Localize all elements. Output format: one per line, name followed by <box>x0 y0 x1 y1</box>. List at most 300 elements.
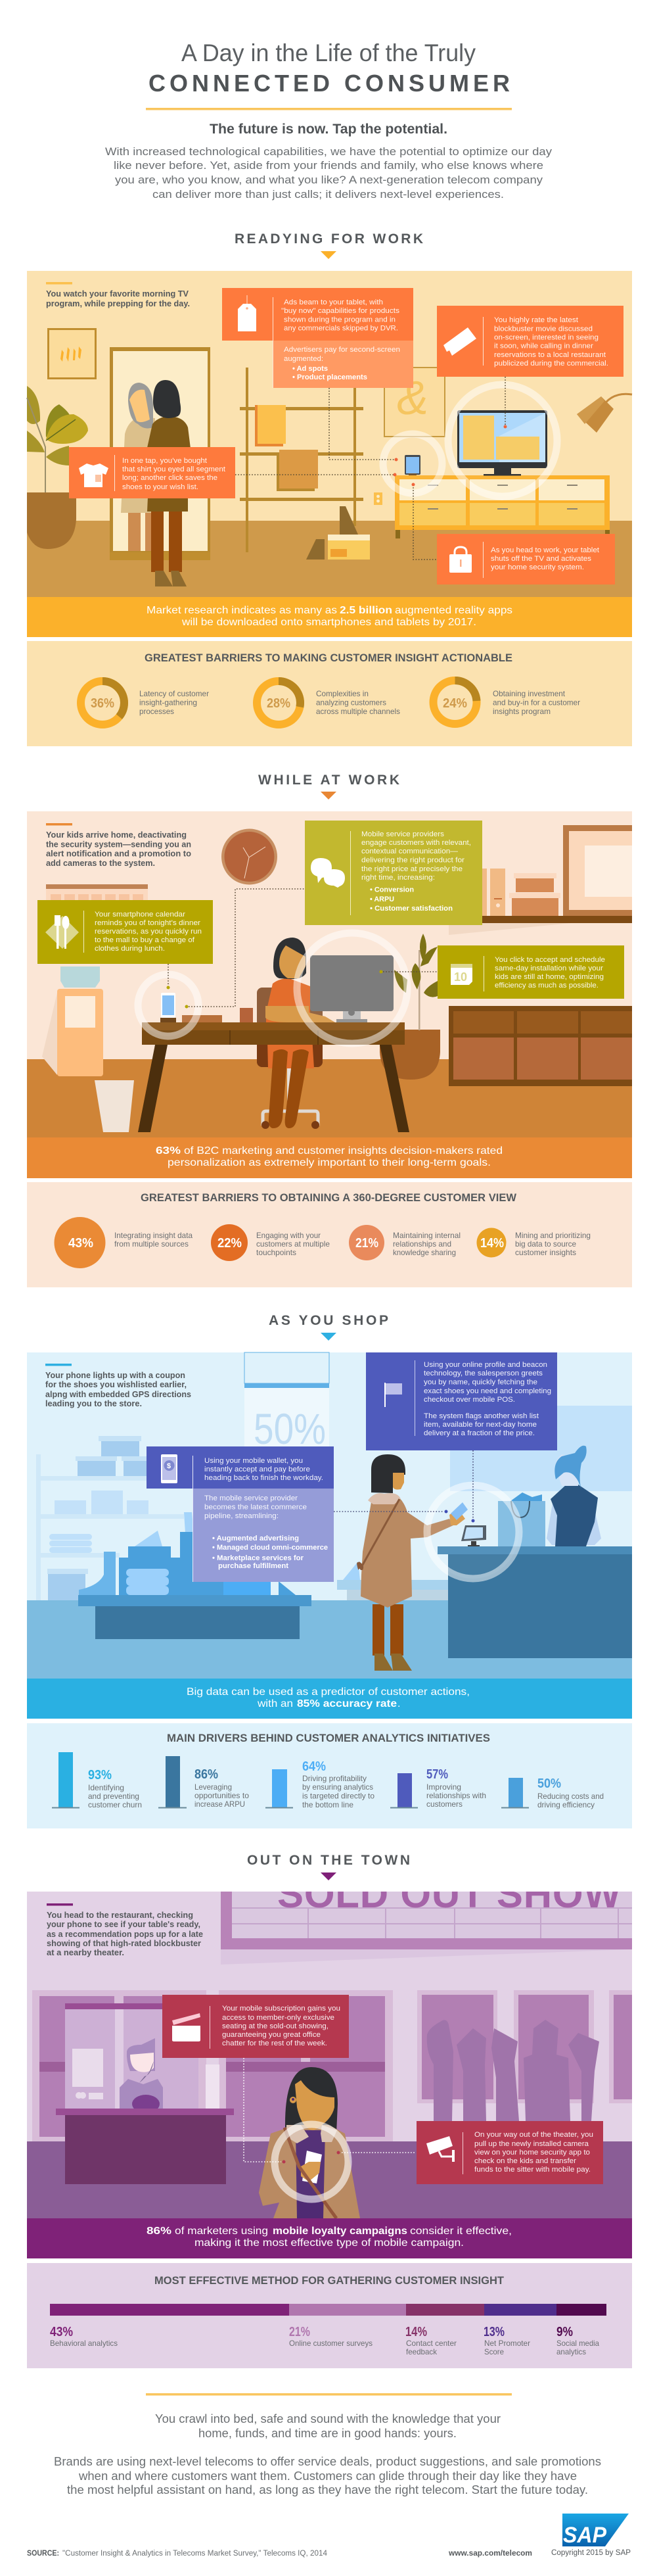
icon: shirt <box>79 464 108 487</box>
shelf with boxes <box>449 825 632 935</box>
SAP logo: SAP <box>563 2523 606 2548</box>
callout: service providers: • ARPU <box>370 895 394 903</box>
theater marquee: SOLD OUT SHOW <box>277 1872 621 1916</box>
donut 24% <box>434 680 477 724</box>
label 50%: Reducing costs and <box>537 1792 604 1801</box>
callout: movie rating: You highly rate the latest <box>494 316 578 324</box>
callout: salesperson greeting: exact shoes you need and completing <box>424 1387 551 1395</box>
callout: service providers: • Conversion <box>370 886 414 894</box>
label 64% <box>302 1759 374 1809</box>
outlet <box>374 492 382 505</box>
lamp <box>577 394 632 433</box>
bar 93% <box>52 1752 79 1808</box>
label 24%: and buy-in for a customer <box>493 698 580 707</box>
stat band: mobile loyalty campaigns: making it the most effective type of mobile campaign. <box>194 2237 464 2249</box>
label 9% <box>556 2325 599 2356</box>
bubble 43% <box>54 1217 105 1268</box>
callout: movie rating <box>437 306 623 377</box>
intro paragraph: like never before. Yet, aside from your friends and family, who else knows where <box>114 159 543 172</box>
heading: MAIN DRIVERS BEHIND CUSTOMER ANALYTICS INITIATIVES <box>167 1732 490 1744</box>
icon: calendar <box>451 964 472 985</box>
chair <box>257 988 323 1129</box>
callout: mobile wallet <box>147 1446 334 1582</box>
callout: member seating: chatter for the rest of the week. <box>222 2039 327 2047</box>
label 28% <box>316 689 400 716</box>
callout: mobile wallet: • Managed cloud omni-commerce <box>212 1544 328 1552</box>
label 22% <box>256 1231 330 1257</box>
intro text <box>46 282 190 308</box>
callout: home security: your home security system. <box>491 563 584 571</box>
display table with goods <box>78 1532 311 1639</box>
donut 24%: 24% <box>443 696 467 711</box>
callout: security camera: check on the kids and transfer <box>474 2157 576 2165</box>
label 43% <box>50 2325 118 2348</box>
label 14% <box>515 1231 591 1257</box>
intro text: for the shoes you wishlisted earlier, <box>45 1379 187 1389</box>
callout: shirt purchase: long; another click saves the <box>122 474 217 482</box>
bubble 14% <box>477 1228 506 1257</box>
plant <box>27 386 88 549</box>
stat band: big data accuracy: . <box>397 1698 400 1709</box>
closing text: the most helpful assistant on hand, as long as they have the right telecom. Start the future today. <box>67 2483 588 2496</box>
callout: calendar reminder <box>37 900 213 964</box>
callout: security camera <box>417 2121 603 2184</box>
callout: salesperson greeting: technology, the salesperson greets <box>424 1370 543 1377</box>
label 43%: 43% <box>50 2325 73 2339</box>
label 36%: Latency of customer <box>139 689 209 698</box>
pedestal behind shopper <box>337 1562 452 1600</box>
heading: while at work <box>258 773 399 799</box>
source: SOURCE: <box>27 2550 59 2558</box>
dotted connector lines <box>244 2058 415 2163</box>
label 36%: processes <box>139 707 174 716</box>
label 43%: from multiple sources <box>114 1239 189 1249</box>
heading: GREATEST BARRIERS TO MAKING CUSTOMER INSIGHT ACTIONABLE <box>145 652 512 664</box>
label 22%: Engaging with your <box>256 1231 321 1240</box>
label 57%: Improving <box>426 1782 461 1792</box>
callout: service providers: right time, increasing: <box>361 874 435 882</box>
panel: most effective method stacked bar <box>27 2263 632 2368</box>
label 57%: customers <box>426 1800 463 1809</box>
callout: member seating <box>162 1995 349 2058</box>
subtitle: The future is now. Tap the potential. <box>210 122 447 137</box>
label 14%: big data to source <box>515 1239 576 1249</box>
callout: ads on tablet: Advertisers pay for second-screen <box>284 346 400 354</box>
cashier <box>120 2038 163 2113</box>
panel: readying for work scene <box>27 271 632 597</box>
closing text: You crawl into bed, safe and sound with the knowledge that your <box>155 2412 501 2425</box>
label 64%: the bottom line <box>302 1800 353 1809</box>
sale window <box>244 1352 329 1453</box>
label 21%: Maintaining internal <box>393 1231 461 1240</box>
heading: GREATEST BARRIERS TO OBTAINING A 360-DEGREE CUSTOMER VIEW <box>141 1191 517 1204</box>
label 14%: customer insights <box>515 1248 576 1257</box>
label 64%: is targeted directly to <box>302 1792 374 1801</box>
bubble 14%: 14% <box>480 1236 504 1251</box>
callout: service providers <box>305 821 482 925</box>
heading: out on the town <box>247 1853 410 1880</box>
intro paragraph: can deliver more than just calls; it delivers next-level experiences. <box>152 188 504 201</box>
label 64%: by ensuring analytics <box>302 1782 373 1792</box>
callout: service providers: • Customer satisfaction <box>370 905 453 913</box>
callout: mobile wallet: becomes the latest commerce <box>204 1504 307 1512</box>
callout: movie rating: it soon, while calling in dinner <box>494 343 593 350</box>
desk <box>138 1022 409 1132</box>
callout: ads on tablet: "buy now" capabilities for products <box>281 307 400 315</box>
footer <box>27 2514 631 2558</box>
label 64%: Driving profitability <box>302 1774 367 1783</box>
stat band: mobile loyalty campaigns: consider it effective, <box>410 2226 512 2237</box>
callout: mobile wallet: heading back to finish the workday. <box>204 1474 323 1482</box>
label 21% <box>289 2325 373 2348</box>
donut 28%: 28% <box>267 696 290 711</box>
stat band: personalization: of B2C marketing and customer insights decision-makers rated <box>184 1145 503 1157</box>
dresser <box>395 475 610 538</box>
label 14% <box>405 2325 457 2356</box>
heading: as you shop <box>269 1313 388 1341</box>
label 21%: knowledge sharing <box>393 1248 456 1257</box>
shopping bag <box>498 1492 545 1546</box>
label 24% <box>493 689 580 716</box>
website: www.sap.com/telecom <box>448 2550 532 2558</box>
label 14%: Mining and prioritizing <box>515 1231 591 1240</box>
box and boots <box>306 506 370 560</box>
desk items <box>160 993 253 1022</box>
stat band: augmented reality apps: Market research indicates as many as <box>147 605 337 616</box>
intro text: at a nearby theater. <box>47 1947 124 1957</box>
label 86%: opportunities to <box>194 1791 249 1800</box>
label 28%: Complexities in <box>316 689 369 698</box>
callout: mobile wallet: Using your mobile wallet, you <box>204 1457 303 1465</box>
icon: lock <box>449 547 472 573</box>
callout: salesperson greeting <box>366 1352 557 1450</box>
donut 36%: 36% <box>91 696 114 711</box>
title: CONNECTED CONSUMER <box>148 70 510 97</box>
stat band: big data accuracy: with an <box>257 1698 293 1709</box>
callout: ads on tablet <box>222 288 413 388</box>
label 93% <box>88 1768 142 1809</box>
label 22%: touchpoints <box>256 1248 296 1257</box>
intro paragraph: you are, who you know, and what you like? A next-generation telecom company <box>115 174 543 186</box>
mirror <box>110 347 210 560</box>
stat band: mobile loyalty campaigns: mobile loyalty campaigns <box>273 2226 407 2237</box>
stat band: personalization <box>27 1137 632 1178</box>
intro text: You head to the restaurant, checking <box>47 1910 193 1920</box>
theater windows <box>32 1990 632 2141</box>
intro text: alpng with embedded GPS directions <box>45 1389 191 1399</box>
label 9%: 9% <box>556 2325 573 2339</box>
label 57%: relationships with <box>426 1791 486 1800</box>
wall clock <box>221 828 277 885</box>
bubble 22% <box>211 1224 248 1261</box>
panel: barriers to 360-degree view <box>27 1182 632 1287</box>
callout: member seating: Your mobile subscription gains you <box>222 2005 340 2013</box>
label 21% <box>393 1231 461 1257</box>
wall picture <box>49 329 96 379</box>
stat band: personalization: 63% <box>156 1145 181 1157</box>
callout: shirt purchase: that shirt you eyed all segment <box>122 465 225 473</box>
bar 57% <box>390 1773 418 1808</box>
callout: calendar reminder: to the mall to buy a change of <box>95 936 195 944</box>
callout: movie rating: publicized during the commercial. <box>494 360 608 368</box>
stat band: augmented reality apps: 2.5 billion <box>340 605 392 616</box>
label 13%: Net Promoter <box>484 2339 530 2348</box>
intro text: program, while prepping for the day. <box>46 298 190 308</box>
label 86%: 86% <box>194 1767 218 1782</box>
label 43%: Behavioral analytics <box>50 2339 118 2348</box>
stacked bar <box>50 2304 606 2316</box>
label 9%: analytics <box>556 2347 586 2356</box>
stat band: augmented reality apps <box>27 597 632 637</box>
stat band: augmented reality apps: augmented reality apps <box>395 605 512 616</box>
bubble 21%: 21% <box>355 1236 378 1251</box>
highlight ring <box>275 2124 348 2199</box>
callout: mobile wallet: purchase fulfillment <box>218 1562 288 1570</box>
waste bin <box>95 1080 134 1132</box>
callout: same-day installation: kids are still at home, optimizing <box>495 973 604 981</box>
callout: mobile wallet: • Augmented advertising <box>212 1535 299 1542</box>
label 14%: Contact center <box>406 2339 457 2348</box>
intro text: Your kids arrive home, deactivating <box>46 830 187 840</box>
queue silhouettes <box>427 2020 599 2121</box>
label 28%: analyzing customers <box>316 698 386 707</box>
stat band: mobile loyalty campaigns: 86% <box>147 2226 171 2237</box>
icon: flag <box>384 1383 402 1407</box>
label 64%: 64% <box>302 1759 326 1774</box>
stat band: big data accuracy: Big data can be used as a predictor of customer actions, <box>187 1686 470 1698</box>
heading: readying for work: READYING FOR WORK <box>235 231 423 247</box>
callout: calendar reminder: Your smartphone calendar <box>95 911 185 918</box>
intro text: your phone to see if your table's ready, <box>47 1919 200 1929</box>
heading: as you shop: AS YOU SHOP <box>269 1313 388 1328</box>
callout: shirt purchase: In one tap, you've bought <box>122 457 207 465</box>
label 9%: Social media <box>556 2339 599 2348</box>
callout: calendar reminder: clothes during lunch. <box>95 945 165 953</box>
wall art: & <box>397 372 428 425</box>
callout: home security <box>437 534 615 584</box>
reflection in mirror <box>121 383 155 551</box>
label 50%: 50% <box>537 1777 561 1791</box>
callout: shirt purchase <box>69 447 235 498</box>
closing text: when and where customers want them. Customers can glide through their day like they have <box>78 2469 577 2483</box>
intro text <box>46 823 191 868</box>
callout: service providers: the right price at precisely the <box>361 865 463 873</box>
icon: ticket <box>443 327 476 356</box>
woman at desk <box>265 938 335 1128</box>
highlight rings <box>138 933 407 1043</box>
callout: movie rating: reservations to a local restaurant <box>494 351 606 359</box>
intro text <box>47 1903 203 1957</box>
callout: member seating: guaranteeing you great office <box>222 2031 321 2039</box>
panel: while at work scene <box>27 811 632 1137</box>
closing text: Brands are using next-level telecoms to offer service deals, product suggestions, and sale promotions <box>54 2455 601 2468</box>
label 57%: 57% <box>426 1767 448 1782</box>
callout: calendar reminder: reminds you of tonight's dinner <box>95 919 200 927</box>
label 14%: feedback <box>406 2347 438 2356</box>
copyright: Copyright 2015 by SAP <box>551 2549 631 2557</box>
heading: while at work: WHILE AT WORK <box>258 773 399 788</box>
label 57% <box>426 1767 486 1809</box>
intro text: alert notification and a promotion to <box>46 849 191 859</box>
label 28%: across multiple channels <box>316 707 400 716</box>
intro text: leading you to the store. <box>45 1398 142 1408</box>
stat band: augmented reality apps: will be downloaded onto smartphones and tablets by 2017. <box>181 617 476 628</box>
water cooler <box>42 966 103 1076</box>
bubble 21% <box>349 1225 384 1260</box>
stat band: mobile loyalty campaigns <box>27 2218 632 2258</box>
callout: service providers: contextual communication— <box>361 847 458 855</box>
label 24%: insights program <box>493 707 551 716</box>
icon: phone with dollar: $ <box>167 1462 171 1470</box>
ticket booth <box>56 2003 234 2184</box>
callout: security camera: view on your home security app to <box>474 2149 590 2157</box>
panel: as you shop scene <box>27 1352 632 1679</box>
icon: phone with dollar <box>161 1454 177 1483</box>
callout: service providers: engage customers with relevant, <box>361 839 471 847</box>
bar 64% <box>265 1769 293 1808</box>
highlight rings <box>383 385 557 496</box>
bubble 43%: 43% <box>68 1236 93 1251</box>
label 86% <box>194 1767 249 1809</box>
dotted connector lines <box>167 889 438 1009</box>
wall calendar <box>46 884 148 900</box>
callout: ads on tablet: augmented: <box>284 355 323 363</box>
title <box>148 39 510 97</box>
label 93%: customer churn <box>88 1800 142 1809</box>
callout: ads on tablet: shown during the program and in <box>284 316 396 323</box>
label 93%: and preventing <box>88 1792 139 1801</box>
shopper <box>358 1454 468 1671</box>
callout: mobile wallet: • Marketplace services for <box>212 1554 304 1562</box>
callout: mobile wallet: instantly accept and pay before <box>204 1466 310 1473</box>
label 36% <box>139 689 209 716</box>
callout: ads on tablet: any commercials skipped by DVR. <box>284 325 398 333</box>
callout: ads on tablet: • Product placements <box>292 373 367 381</box>
counter <box>438 1546 632 1658</box>
intro text: add cameras to the system. <box>46 858 155 868</box>
closing text: home, funds, and time are in good hands: yours. <box>198 2427 457 2440</box>
intro text <box>45 1364 191 1408</box>
callout: mobile wallet: pipeline, streamlining: <box>204 1512 279 1520</box>
callout: home security: As you head to work, your tablet <box>491 546 599 554</box>
callout: home security: shuts off the TV and activates <box>491 555 592 563</box>
title: A Day in the Life of the Truly <box>181 39 476 66</box>
plant <box>380 934 440 1080</box>
highlight ring <box>427 1485 519 1579</box>
icon: camera <box>426 2136 455 2162</box>
icon: clapperboard <box>172 2013 200 2041</box>
callout: member seating: seating at the sold-out showing, <box>222 2022 328 2030</box>
callout: service providers: Mobile service providers <box>361 830 445 838</box>
label 13%: 13% <box>484 2325 505 2339</box>
stat band: big data accuracy <box>27 1679 632 1719</box>
intro text: You watch your favorite morning TV <box>46 289 189 298</box>
intro paragraph: With increased technological capabilities, we have the potential to optimize our day <box>105 145 553 158</box>
callout: salesperson greeting: The system flags another wish list <box>424 1412 539 1420</box>
label 13% <box>484 2325 530 2356</box>
heading: readying for work <box>235 231 423 259</box>
label 86%: Leveraging <box>194 1782 232 1792</box>
callout: same-day installation: efficiency as much as possible. <box>495 982 599 990</box>
intro paragraph <box>105 145 553 201</box>
sale window: 50% <box>254 1404 326 1453</box>
heading: out on the town: OUT ON THE TOWN <box>247 1853 410 1868</box>
wall art <box>384 368 445 437</box>
SAP logo <box>562 2514 629 2548</box>
tablet <box>405 455 420 475</box>
stat band: mobile loyalty campaigns: of marketers using <box>175 2226 268 2237</box>
theater marquee <box>221 1892 632 1965</box>
label 86%: increase ARPU <box>194 1800 245 1809</box>
callout: security camera: pull up the newly installed camera <box>474 2140 589 2148</box>
bar 50% <box>501 1778 529 1808</box>
label 50%: driving efficiency <box>537 1800 595 1809</box>
callout: security camera: On your way out of the theater, you <box>474 2131 593 2139</box>
intro text: showing of that high-rated blockbuster <box>47 1938 201 1948</box>
monitor <box>310 955 394 1022</box>
callout: movie rating: on-screen, interested in seeing <box>494 333 599 341</box>
label 93%: 93% <box>88 1768 112 1782</box>
shelves <box>36 1436 194 1600</box>
label 24%: Obtaining investment <box>493 689 566 698</box>
salesperson <box>547 1446 601 1546</box>
label 21%: 21% <box>289 2325 310 2339</box>
intro text: as a recommendation pops up for a late <box>47 1929 203 1939</box>
panel: main drivers bar chart <box>27 1723 632 1828</box>
callout: salesperson greeting: delivery at a fraction of the price. <box>424 1429 535 1437</box>
label 43%: Integrating insight data <box>114 1231 193 1240</box>
icon: fork and spoon <box>45 915 79 949</box>
intro text: Your phone lights up with a coupon <box>45 1370 185 1380</box>
callout: salesperson greeting: item, available for next-day home <box>424 1421 537 1429</box>
icon: price tag <box>238 295 256 331</box>
callout: salesperson greeting: Using your online profile and beacon <box>424 1361 547 1369</box>
panel: barriers to actionable insight <box>27 641 632 746</box>
stat band: personalization: personalization as extremely important to their long-term goals. <box>168 1157 491 1168</box>
label 50% <box>537 1777 604 1809</box>
dotted connector lines <box>235 377 507 560</box>
woman with phone <box>259 2067 360 2218</box>
bar 86% <box>158 1756 187 1808</box>
callout: security camera: funds to the sitter with mobile pay. <box>474 2166 591 2174</box>
callout: service providers: delivering the right product for <box>361 857 464 865</box>
stat band: big data accuracy: 85% accuracy rate <box>297 1698 397 1709</box>
woman <box>146 380 191 586</box>
callout: calendar reminder: reservations, as you quickly run <box>95 928 202 936</box>
heading: MOST EFFECTIVE METHOD FOR GATHERING CUSTOMER INSIGHT <box>154 2274 505 2287</box>
TV <box>457 410 547 476</box>
callout: mobile wallet: The mobile service provider <box>204 1494 298 1502</box>
label 14%: 14% <box>405 2325 427 2339</box>
label 13%: Score <box>484 2347 504 2356</box>
callout: movie rating: blockbuster movie discussed <box>494 325 593 333</box>
callout: same-day installation: same-day installation while your <box>495 965 603 972</box>
icon: chat bubbles <box>311 858 345 888</box>
header: title and intro <box>105 39 553 201</box>
cabinet <box>449 1006 632 1086</box>
label 22%: customers at multiple <box>256 1239 330 1249</box>
callout: ads on tablet: • Ad spots <box>292 365 328 373</box>
icon: calendar: 10 <box>454 970 467 984</box>
callout: same-day installation: You click to accept and schedule <box>495 956 605 964</box>
closing text <box>54 2412 601 2496</box>
dotted connector lines <box>334 1450 474 1523</box>
callout: ads on tablet: Ads beam to your tablet, with <box>284 298 383 306</box>
callout: member seating: access to member-only exclusive <box>222 2014 334 2022</box>
ladder shelf and towels <box>240 368 363 552</box>
panel: out on the town scene <box>27 1872 632 2218</box>
donut 36% <box>81 681 124 725</box>
